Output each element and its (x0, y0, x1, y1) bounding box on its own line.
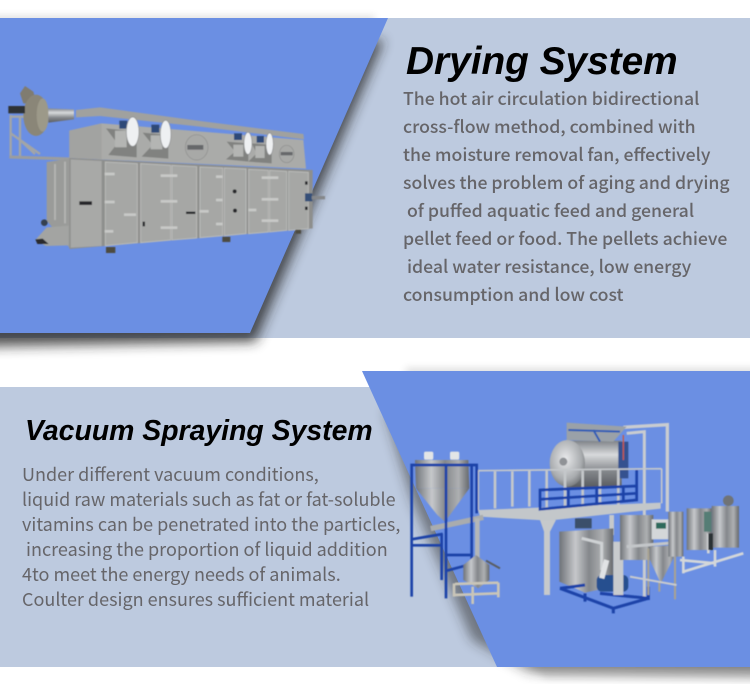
text block: drying description (403, 86, 730, 307)
fan support frame (9, 115, 72, 159)
dark door handles (79, 181, 308, 226)
hopper (415, 452, 469, 522)
doors (105, 162, 308, 246)
text block: drying description: pellet feed or food. The pellets achieve (403, 226, 727, 251)
cone tank (630, 545, 677, 599)
panel: vacuum blue shape (362, 371, 750, 667)
white filter ovals (126, 117, 273, 155)
panel: drying system background (0, 18, 750, 338)
text block: drying description: consumption and low cost (403, 282, 624, 307)
screw conveyor (431, 517, 483, 563)
water tank (559, 518, 613, 593)
fan (8, 86, 74, 136)
text block: drying description: The hot air circulation bidirectional (403, 86, 699, 111)
lower body (69, 158, 313, 249)
text block: vacuum spraying description (22, 461, 400, 612)
hopper blue frame (412, 465, 477, 598)
pump (597, 542, 628, 595)
blue skid (560, 585, 648, 613)
discharge chute (35, 226, 69, 246)
platform (478, 503, 661, 521)
text block: drying description: the moisture removal fan, effectively (403, 142, 711, 167)
text block: drying description: of puffed aquatic feed and general (407, 198, 694, 223)
text block: vacuum spraying description: 4to meet the energy needs of animals. (22, 561, 341, 587)
text block: vacuum spraying description: liquid raw materials such as fat or fat-soluble (22, 486, 396, 512)
machine: vacuum spraying line (412, 423, 743, 613)
right tank row (668, 495, 743, 573)
mixing tank (620, 515, 675, 560)
platform columns and supports (540, 515, 614, 595)
blue frame under vessel (540, 470, 637, 509)
text block: vacuum spraying description: Coulter design ensures sufficient material (22, 586, 369, 612)
panel: drying blue shape (0, 18, 388, 333)
hoods (106, 128, 272, 163)
text block: vacuum spraying description: Under different vacuum conditions, (22, 461, 319, 487)
shadow: vacuum blue shape (385, 368, 750, 680)
machine: dryer (8, 86, 325, 253)
shadow: drying blue shape (0, 16, 384, 347)
text block: vacuum spraying description: vitamins can be penetrated into the particles, (22, 511, 400, 537)
lower left body (47, 159, 70, 248)
platform rails (478, 469, 662, 517)
small vessel on stand (454, 555, 500, 604)
heading: Drying System: Drying System (406, 40, 678, 83)
vacuum vessel (550, 423, 628, 487)
motors (119, 121, 264, 143)
round inspection covers (185, 135, 294, 163)
text block: drying description: cross-flow method, combined with (403, 114, 696, 139)
upper housing (69, 123, 306, 169)
panel: vacuum spraying background (0, 387, 750, 667)
text block: vacuum spraying description: increasing the proportion of liquid addition (26, 536, 388, 562)
side motor (305, 193, 325, 201)
text block: drying description: solves the problem of aging and drying (403, 170, 730, 195)
pipes (623, 425, 667, 600)
door latches (105, 173, 278, 233)
feet (106, 230, 301, 253)
text block: drying description: ideal water resistance, low energy (407, 254, 691, 279)
top rail (76, 107, 304, 139)
heading: Vacuum Spraying System: Vacuum Spraying System (25, 415, 373, 447)
